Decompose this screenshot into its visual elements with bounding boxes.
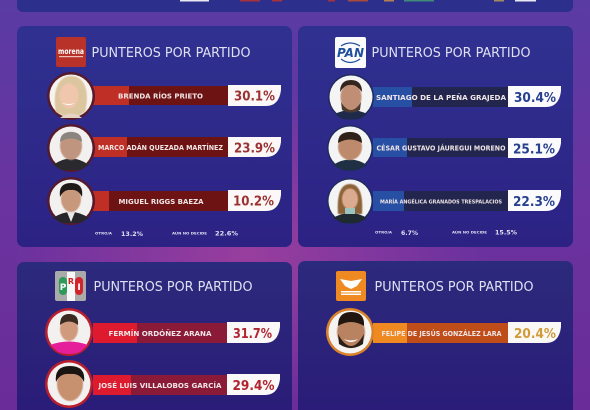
icon: Morena logo: morena — [58, 47, 84, 56]
icon: Morena logo — [56, 37, 86, 67]
portrait — [327, 125, 373, 171]
icon: PRI logo: R — [68, 277, 74, 286]
icon: PRI logo: I — [77, 283, 81, 293]
footer: other and undecided: 6.7% — [401, 229, 418, 237]
icon: PRI logo — [55, 271, 86, 301]
portrait — [327, 178, 373, 224]
icon: PAN logo: PAN — [337, 46, 364, 60]
icon: Movimiento Ciudadano logo — [336, 271, 366, 301]
footer: other and undecided: AÚN NO DECIDE — [452, 230, 487, 234]
portrait — [326, 308, 374, 356]
heading: PUNTEROS POR PARTIDO — [372, 45, 530, 61]
row: Felipe de Jesús González Lara — [326, 308, 561, 356]
footer: other and undecided: OTRO/A — [375, 230, 392, 234]
row: Brenda Ríos Prieto: 30.1% — [234, 90, 275, 104]
row: Santiago de la Peña Grajeda — [328, 74, 561, 120]
row: María Angélica Granados Trespalacios: MARÍA ANGÉLICA GRANADOS TRESPALACIOS — [380, 198, 502, 206]
row: José Luis Villalobos García — [45, 360, 280, 408]
panel: top summary strip — [17, 0, 573, 12]
row: César Gustavo Jáuregui Moreno — [327, 125, 561, 171]
row: Fermín Ordóñez Arana — [45, 308, 280, 356]
portrait — [328, 74, 374, 120]
portrait — [45, 360, 93, 408]
portrait — [45, 308, 93, 356]
heading: PUNTEROS POR PARTIDO — [94, 279, 252, 295]
footer: other and undecided: 13.2% — [121, 230, 143, 238]
row: Brenda Ríos Prieto: BRENDA RÍOS PRIETO — [118, 92, 203, 100]
panel: PAN — [298, 26, 573, 247]
portrait — [47, 124, 95, 172]
icon: PAN logo — [335, 37, 366, 68]
footer: other and undecided: 15.5% — [495, 228, 517, 236]
row: Felipe de Jesús González Lara: FELIPE DE JESÚS GONZÁLEZ LARA — [382, 329, 502, 338]
row: Miguel Riggs Baeza — [47, 177, 281, 225]
heading: PUNTEROS POR PARTIDO — [374, 279, 534, 295]
footer: other and undecided: AÚN NO DECIDE — [172, 230, 207, 236]
row: Marco Adán Quezada Martínez: MARCO ADÁN QUEZADA MARTÍNEZ — [98, 143, 223, 152]
row: Miguel Riggs Baeza: 10.2% — [233, 194, 274, 210]
footer: other and undecided — [375, 228, 517, 237]
row: Marco Adán Quezada Martínez — [47, 124, 281, 172]
footer: other and undecided — [95, 230, 238, 238]
row: Marco Adán Quezada Martínez: 23.9% — [234, 142, 275, 156]
footer: other and undecided: OTRO/A — [95, 230, 112, 236]
footer: other and undecided: 22.6% — [215, 230, 238, 238]
row: Santiago de la Peña Grajeda: 30.4% — [514, 91, 556, 106]
row: Fermín Ordóñez Arana: 31.7% — [233, 327, 272, 342]
row: Santiago de la Peña Grajeda: SANTIAGO DE LA PEÑA GRAJEDA — [376, 93, 507, 102]
row: José Luis Villalobos García: JOSÉ LUIS VILLALOBOS GARCÍA — [97, 381, 222, 390]
icon: PRI logo: P — [60, 283, 67, 293]
row: Felipe de Jesús González Lara: 20.4% — [514, 327, 556, 342]
row: Miguel Riggs Baeza: MIGUEL RIGGS BAEZA — [118, 198, 204, 206]
row: Brenda Ríos Prieto — [47, 72, 281, 120]
row: María Angélica Granados Trespalacios — [327, 178, 561, 224]
panel: PRI — [17, 262, 292, 410]
portrait — [47, 177, 95, 225]
row: César Gustavo Jáuregui Moreno: CÉSAR GUSTAVO JÁUREGUI MORENO — [376, 144, 506, 152]
row: Fermín Ordóñez Arana: FERMÍN ORDÓÑEZ ARANA — [108, 329, 212, 338]
portrait — [47, 72, 95, 120]
panel: Morena — [17, 26, 292, 247]
row: José Luis Villalobos García: 29.4% — [232, 379, 274, 394]
row: María Angélica Granados Trespalacios: 22.3% — [513, 195, 555, 210]
row: César Gustavo Jáuregui Moreno: 25.1% — [513, 142, 555, 158]
panel: Movimiento Ciudadano — [298, 261, 573, 410]
heading: PUNTEROS POR PARTIDO — [92, 45, 250, 61]
